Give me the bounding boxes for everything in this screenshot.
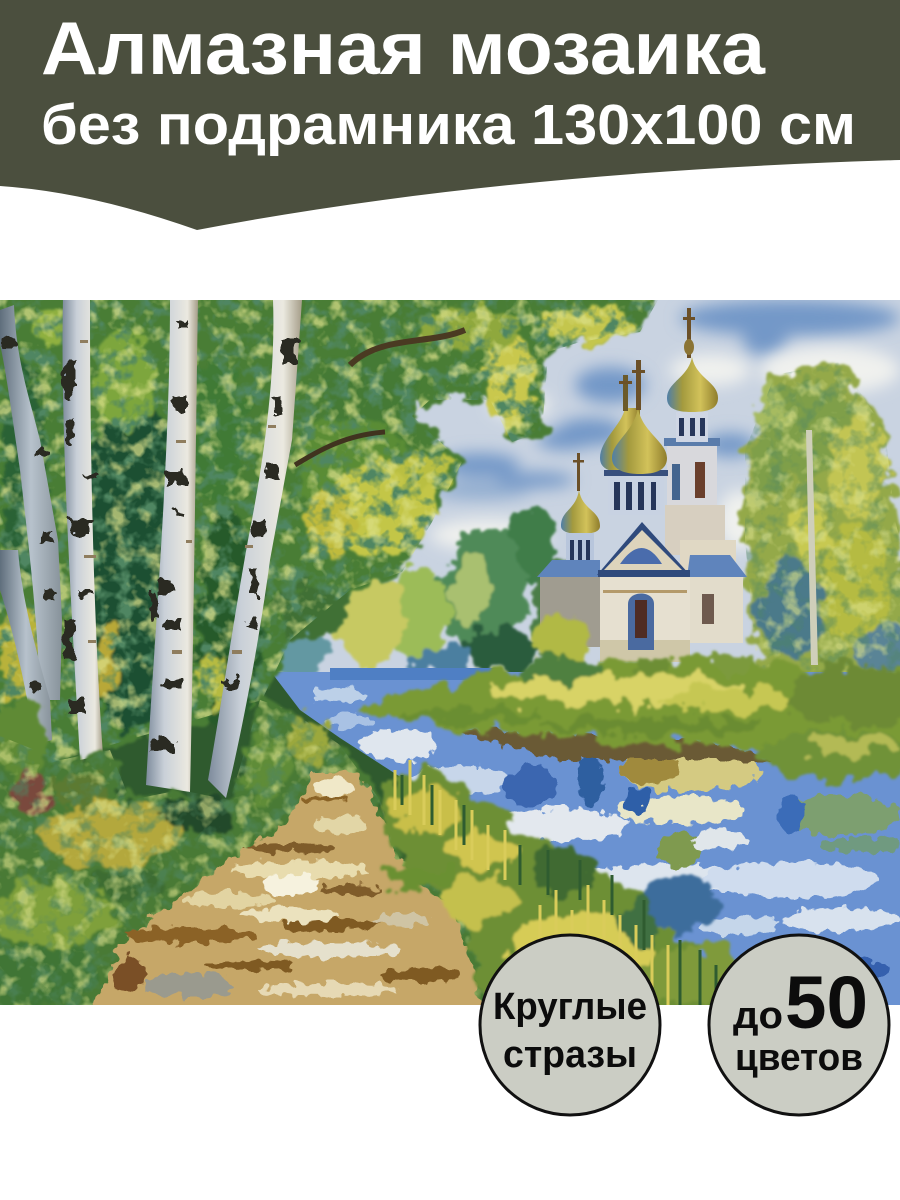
reflection band under island	[440, 728, 780, 760]
reeds	[379, 760, 736, 1005]
dirt path	[92, 770, 482, 1005]
right tree	[745, 362, 900, 700]
roofs	[537, 560, 600, 577]
facade	[600, 577, 690, 640]
central dome	[612, 408, 667, 474]
badge: up to 50 colours: 50	[785, 961, 868, 1044]
tower base	[665, 505, 725, 555]
left forest	[0, 300, 658, 766]
small dome	[561, 490, 600, 534]
badge: up to 50 colours: цветов	[735, 1037, 863, 1079]
rear dome	[600, 408, 640, 473]
central drum	[608, 473, 664, 515]
painting: church by the river	[0, 260, 900, 1040]
title: Алмазная мозаика	[41, 6, 766, 90]
birch trunks	[0, 300, 302, 798]
badge: round rhinestones	[480, 935, 660, 1115]
sky	[278, 300, 900, 672]
badge: up to 50 colours: до	[733, 995, 783, 1037]
header banner	[0, 0, 900, 230]
badge: up to 50 colours	[709, 935, 889, 1115]
ground base	[50, 676, 408, 862]
foreground foliage left	[0, 692, 484, 1005]
church	[537, 308, 747, 662]
island and far bank	[362, 612, 900, 779]
river	[270, 668, 900, 1005]
subtitle: без подрамника 130х100 см	[41, 93, 856, 157]
wings	[540, 577, 600, 647]
badge: round rhinestones: Круглые	[493, 986, 647, 1028]
background trees	[259, 509, 599, 676]
bell tower	[664, 308, 720, 505]
badge: round rhinestones: стразы	[503, 1034, 637, 1076]
